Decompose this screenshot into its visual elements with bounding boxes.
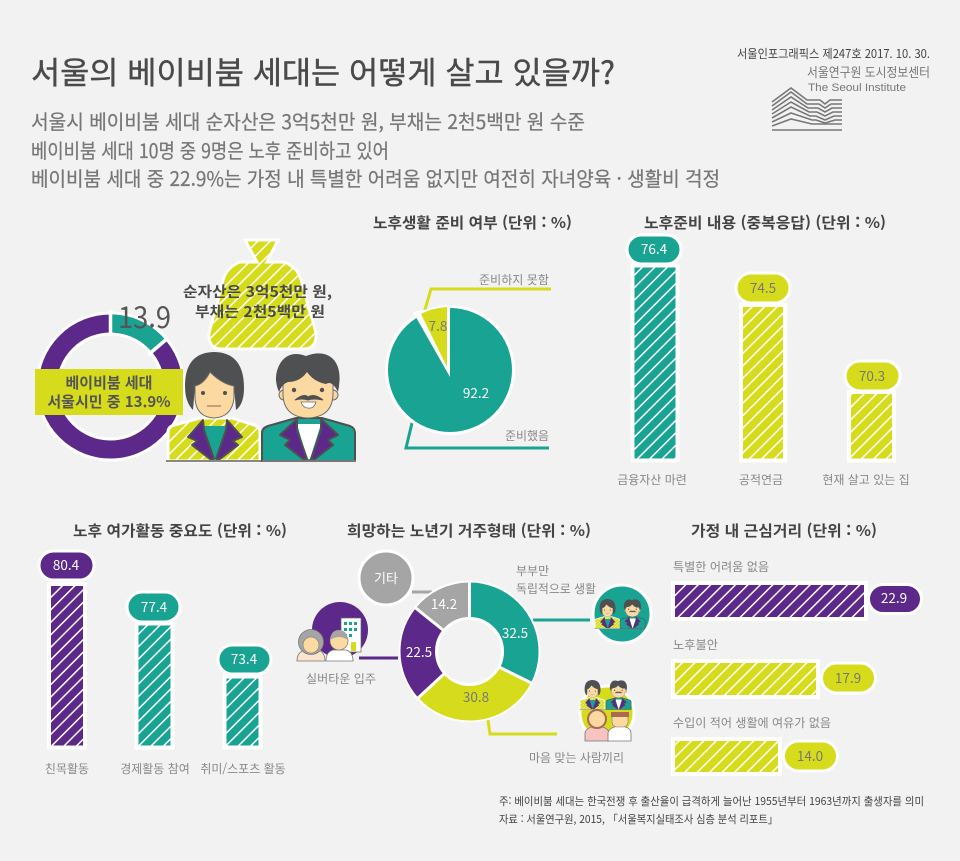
value: 7.8: 7.8	[429, 315, 447, 335]
value: 32.5: 32.5	[502, 622, 528, 642]
heading: 가정 내 근심거리 (단위 : %)	[691, 520, 877, 541]
publication info and logo: 서울연구원 도시정보센터	[807, 62, 930, 81]
publication info and logo: The Seoul Institute	[808, 82, 906, 94]
bar: friendship 80.4: 친목활동	[45, 760, 89, 777]
callout: share of Seoul residents: 베이비붐 세대	[65, 372, 153, 393]
value: 30.8: 30.8	[463, 686, 489, 706]
icon: seniors and building	[297, 602, 368, 661]
icon: other circle	[359, 551, 413, 605]
value label 13.9: 13.9	[118, 295, 171, 337]
bar: hobbies and sports 73.4: 73.4	[231, 648, 258, 668]
subtitle text block	[31, 106, 720, 192]
heading: 노후준비 내용 (중복응답) (단위 : %)	[644, 212, 886, 233]
bar: current home 70.3: 70.3	[859, 365, 885, 385]
bar: hobbies and sports 73.4: 취미/스포츠 활동	[200, 760, 286, 777]
donut chart	[398, 580, 540, 722]
heading: 노후 여가활동 중요도 (단위 : %)	[73, 520, 287, 541]
bar: current home 70.3: 현재 살고 있는 집	[822, 471, 910, 488]
icon: other circle: 기타	[374, 568, 398, 587]
label: like-minded people: 마음 맞는 사람끼리	[529, 749, 624, 766]
pie chart	[386, 305, 514, 434]
callout: share of Seoul residents	[35, 369, 183, 415]
bar: financial assets 76.4: 금융자산 마련	[617, 471, 687, 488]
value: 22.5: 22.5	[406, 641, 432, 661]
footnotes	[499, 793, 924, 827]
donut chart: 13.9 percent	[48, 310, 174, 450]
label: prepared: 준비했음	[505, 427, 549, 444]
publication info and logo: 서울인포그래픽스 제247호 2017. 10. 30.	[737, 45, 930, 62]
bar: low income 14.0: 14.0	[797, 745, 823, 765]
panel: preferred housing donut	[297, 520, 651, 766]
bar: friendship 80.4	[39, 551, 94, 777]
bar: hobbies and sports 73.4	[200, 645, 286, 777]
panel: baby boomer share and wealth	[35, 240, 356, 461]
subtitle text block: 베이비붐 세대 10명 중 9명은 노후 준비하고 있어	[31, 135, 389, 164]
heading: 노후생활 준비 여부 (단위 : %)	[373, 212, 572, 233]
panel: household worries bars	[673, 520, 922, 774]
icon: money bag	[209, 240, 316, 349]
footnotes: 주: 베이비붐 세대는 한국전쟁 후 출산율이 급격하게 늘어난 1955년부터 1963년까지 출생자를 의미	[499, 793, 924, 809]
publication info and logo	[737, 45, 930, 130]
heading: 희망하는 노년기 거주형태 (단위 : %)	[347, 520, 591, 541]
callout: assets and debts	[183, 281, 332, 322]
value: 14.2: 14.2	[431, 593, 457, 613]
subtitle text block: 서울시 베이비붐 세대 순자산은 3억5천만 원, 부채는 2천5백만 원 수준	[31, 106, 585, 135]
icon: institute logo	[772, 88, 842, 130]
icon: couple in teal circle	[593, 585, 651, 643]
value: 92.2: 92.2	[463, 382, 489, 402]
bar: economic activity 77.4: 경제활동 참여	[120, 760, 190, 777]
bar: retirement anxiety 17.9: 17.9	[835, 667, 861, 687]
panel: retirement preparation content bars	[617, 212, 910, 488]
panel: leisure activity bars	[39, 520, 287, 777]
bar: current home 70.3	[822, 361, 910, 488]
bar: no special difficulty 22.9: 22.9	[881, 587, 907, 607]
icon: woman	[166, 352, 262, 461]
bar: financial assets 76.4: 76.4	[641, 238, 668, 258]
title: 서울의 베이비붐 세대는 어떻게 살고 있을까?	[31, 48, 615, 93]
bar: retirement anxiety 17.9	[673, 636, 876, 697]
bar: low income 14.0	[673, 714, 838, 774]
bar: public pension 74.5: 공적연금	[739, 471, 783, 488]
footnotes: 자료 : 서울연구원, 2015, 「서울복지실태조사 심층 분석 리포트」	[499, 811, 778, 827]
bar: public pension 74.5: 74.5	[750, 277, 776, 297]
label: couple independent living: 독립적으로 생활	[516, 580, 596, 597]
bar: friendship 80.4: 80.4	[53, 554, 80, 574]
callout: share of Seoul residents: 서울시민 중 13.9%	[47, 391, 171, 412]
panel: retirement preparation pie	[373, 212, 572, 448]
label: couple independent living: 부부만	[516, 562, 549, 579]
label: not prepared: 준비하지 못함	[479, 271, 549, 288]
bar: retirement anxiety 17.9: 노후불안	[673, 636, 718, 653]
subtitle text block: 베이비붐 세대 중 22.9%는 가정 내 특별한 어려움 없지만 여전히 자녀양육 · 생활비 걱정	[31, 163, 720, 192]
leader lines	[359, 592, 590, 734]
icon: man	[262, 353, 356, 461]
bar: no special difficulty 22.9: 특별한 어려움 없음	[673, 558, 769, 575]
leader lines	[406, 289, 551, 448]
icon: group of friends	[579, 680, 634, 741]
bar: economic activity 77.4	[120, 592, 190, 777]
label: silver town: 실버타운 입주	[306, 670, 376, 687]
bar: low income 14.0: 수입이 적어 생활에 여유가 없음	[673, 714, 831, 731]
bar: no special difficulty 22.9	[673, 558, 922, 619]
callout: assets and debts: 부채는 2천5백만 원	[195, 301, 325, 322]
bar: economic activity 77.4: 77.4	[141, 596, 168, 616]
label: couple independent living	[516, 562, 596, 597]
bar: financial assets 76.4	[617, 235, 687, 488]
callout: assets and debts: 순자산은 3억5천만 원,	[183, 281, 332, 302]
bar: public pension 74.5	[736, 273, 790, 488]
